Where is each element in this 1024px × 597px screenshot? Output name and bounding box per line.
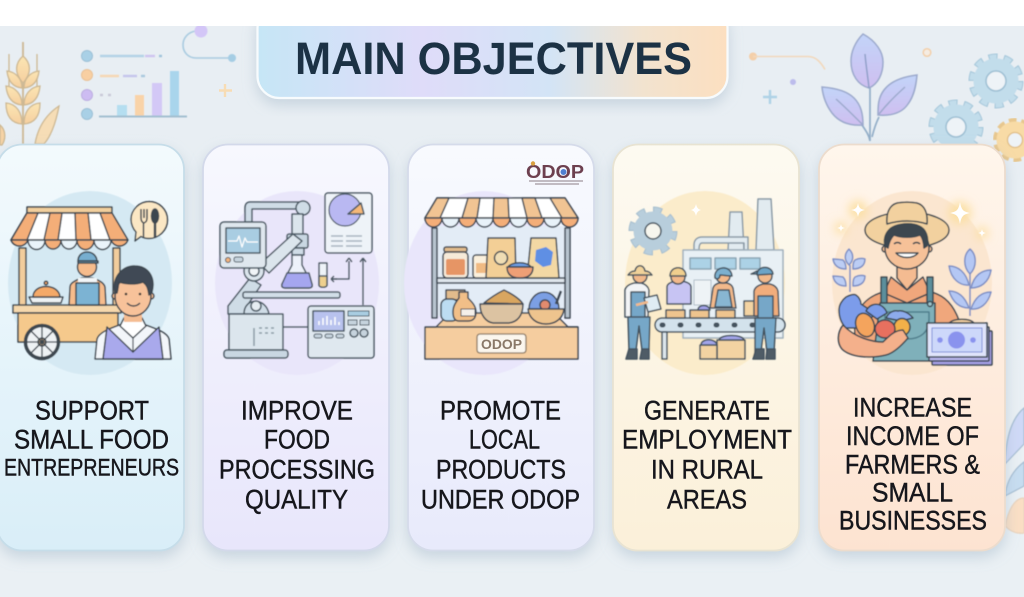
label: [839, 392, 987, 536]
decoration: orange plus: [219, 84, 232, 97]
label: BUSINESSES: [839, 506, 987, 536]
label: PRODUCTS: [436, 454, 566, 484]
decoration: blue gear lower: [933, 104, 979, 150]
label: [421, 396, 580, 514]
panel: increase income of farmers and small businesses: [819, 144, 1005, 550]
label: QUALITY: [245, 484, 348, 514]
label: AREAS: [667, 484, 747, 514]
decoration: small dots and plus: [763, 49, 931, 104]
label: [4, 396, 179, 482]
label: FARMERS &: [845, 450, 980, 480]
label: INCREASE: [853, 392, 972, 422]
label: PROCESSING: [219, 454, 375, 484]
label: FOOD: [264, 424, 330, 454]
decoration: orange gear: [997, 122, 1024, 158]
panel: improve food processing quality: [203, 144, 389, 550]
label: [219, 396, 375, 514]
white top band: [0, 0, 1024, 26]
label: EMPLOYMENT: [622, 424, 792, 454]
stall sign text: ODOP: [481, 337, 522, 352]
title banner: [0, 0, 1024, 98]
panel: support small food entrepreneurs: [0, 144, 184, 550]
icon: market stall: [404, 191, 578, 375]
panel: generate employment in rural areas: [613, 144, 799, 550]
decoration: orange connector: [749, 52, 825, 70]
decoration: connector line: [183, 24, 236, 62]
icon: food cart and entrepreneur: [8, 191, 172, 375]
decoration: blue gear top: [973, 58, 1019, 104]
decoration: wheat: [0, 42, 59, 145]
label: LOCAL: [469, 424, 540, 454]
label: SMALL: [872, 478, 953, 508]
label: IMPROVE: [241, 396, 353, 426]
sparkles: [835, 201, 988, 239]
decoration: data chart: [82, 50, 187, 120]
panel: promote local products under ODOP: [404, 144, 594, 550]
decoration: bottom right leaves: [1005, 408, 1024, 533]
label: [622, 396, 792, 514]
label: SMALL FOOD: [14, 424, 169, 454]
title text: MAIN OBJECTIVES: [295, 33, 692, 84]
label: PROMOTE: [440, 396, 561, 426]
icon: factory and workers: [625, 191, 785, 375]
label: INCOME OF: [846, 421, 979, 451]
logo: ODOP: ODOP: [526, 162, 584, 182]
label: GENERATE: [644, 396, 770, 426]
label: ENTREPRENEURS: [4, 454, 179, 482]
label: UNDER ODOP: [421, 484, 580, 514]
icon: lab robot and equipment: [215, 191, 379, 375]
sparkle: [691, 204, 701, 216]
label: IN RURAL: [651, 454, 763, 484]
decoration: plant: [822, 34, 917, 141]
icon: farmer with produce and money: [832, 191, 992, 375]
label: SUPPORT: [35, 396, 149, 426]
